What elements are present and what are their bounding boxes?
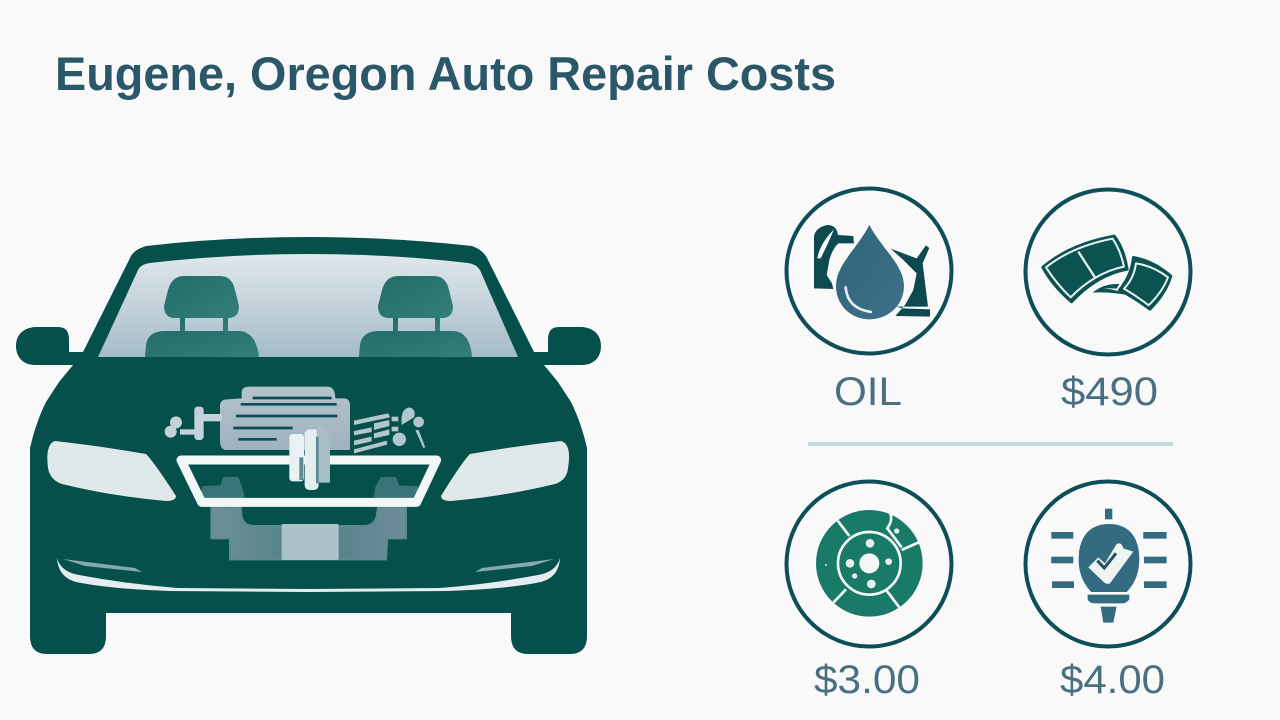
label: OIL: OIL bbox=[834, 370, 902, 414]
icon circle: brake disc bbox=[786, 482, 952, 646]
left headlight bbox=[47, 441, 176, 501]
right seat bbox=[359, 276, 472, 357]
icon circle: light bulb bbox=[1026, 482, 1190, 646]
engine and grille bbox=[165, 387, 437, 560]
left fog light bbox=[63, 559, 142, 572]
grille frame bbox=[181, 460, 437, 502]
icon: bulb with check mark bbox=[1051, 509, 1167, 623]
panel: 3 dollars bbox=[786, 482, 952, 702]
left seat bbox=[145, 276, 259, 357]
icon circle: brake pads bbox=[1026, 190, 1190, 354]
label: $490: $490 bbox=[1061, 370, 1158, 414]
panel: oil bbox=[786, 188, 952, 414]
right headlight bbox=[441, 441, 569, 501]
white cylinders bbox=[289, 427, 330, 490]
label: $4.00: $4.00 bbox=[1060, 658, 1165, 702]
right ribbed part bbox=[354, 407, 425, 453]
left pipe fitting bbox=[165, 407, 222, 440]
icon: cracked brake disc bbox=[816, 510, 924, 617]
icon circle: oil bbox=[786, 188, 952, 354]
engine block bbox=[220, 387, 350, 450]
divider bbox=[808, 442, 1173, 446]
right fog light bbox=[475, 559, 554, 572]
panel: 490 dollars bbox=[1026, 190, 1190, 414]
icon: oil drop with can bbox=[814, 225, 930, 319]
engine cooling lines bbox=[233, 398, 337, 439]
car body bbox=[16, 237, 601, 654]
windshield bbox=[98, 254, 518, 357]
license plate bbox=[282, 524, 339, 560]
car illustration bbox=[16, 237, 601, 654]
icon: brake pads bbox=[1043, 236, 1171, 309]
lower bumper trim bbox=[57, 558, 560, 592]
gear ears inside grille bbox=[202, 478, 418, 497]
label: $3.00: $3.00 bbox=[814, 658, 920, 702]
gear silhouette below grille bbox=[211, 507, 406, 559]
panel: 4 dollars bbox=[1026, 482, 1190, 702]
title: Eugene, Oregon Auto Repair Costs bbox=[55, 47, 836, 100]
